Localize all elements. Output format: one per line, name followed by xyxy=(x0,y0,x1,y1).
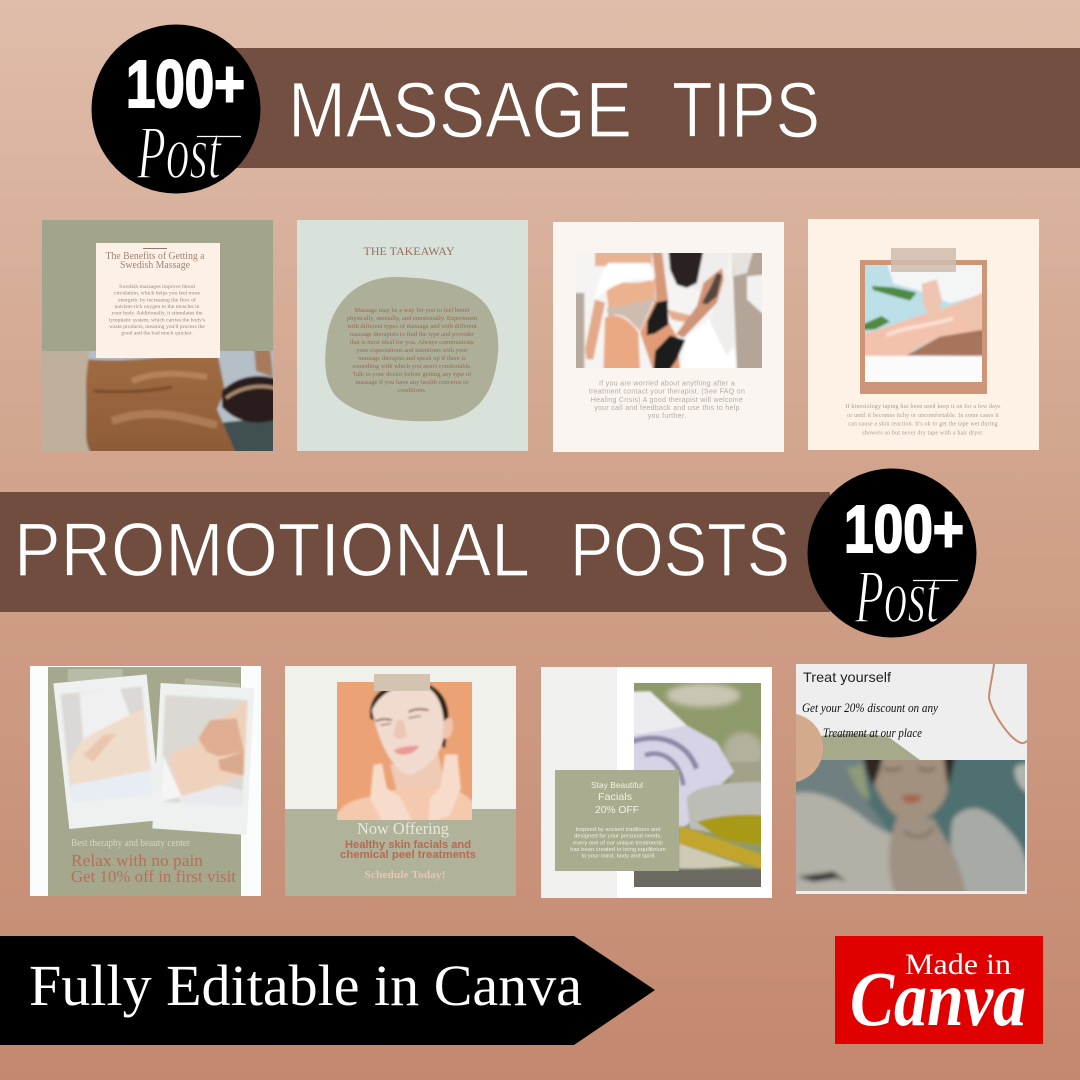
card: now offering: Healthy skin facials and xyxy=(345,839,471,851)
text panel: waste products, meaning you'll process the xyxy=(109,324,205,330)
text panel xyxy=(96,243,220,358)
card: relax with no pain: Relax with no pain xyxy=(71,851,204,870)
card: now offering: chemical peel treatments xyxy=(340,849,476,861)
card: the takeaway: conditions. xyxy=(398,387,427,394)
text box xyxy=(555,770,679,871)
card: the takeaway: with different types of massage and with different xyxy=(347,323,477,330)
text box: designed for your personal needs, xyxy=(574,834,662,840)
card: therapist photo and advice: treatment contact your therapist. (See FAQ on xyxy=(589,389,745,396)
card: now offering: Schedule Today! xyxy=(364,869,446,881)
card: the takeaway: massage therapist and speak up if there is xyxy=(358,355,466,362)
text panel: your body. Additionally, it stimulates the xyxy=(111,311,203,317)
card: the takeaway: your expectations and intentions with your xyxy=(356,347,468,354)
text box: every one of our unique treatments xyxy=(573,840,663,846)
header band: massage tips xyxy=(230,48,1080,168)
badge: 100+ post middle xyxy=(808,468,976,639)
text box: has been created to bring equilibrium xyxy=(570,847,666,853)
polaroid left xyxy=(53,674,162,829)
card: the takeaway: Talk to your doctor before getting any type of xyxy=(353,371,472,378)
text box: Inspired by ancient traditions and xyxy=(575,827,661,833)
card: stay beautiful facials xyxy=(541,667,772,898)
card: treat yourself xyxy=(790,664,1030,897)
text panel: good and the bad much quicker. xyxy=(121,331,193,337)
footer arrow banner: Fully Editable in Canva xyxy=(29,953,582,1018)
card: the takeaway: something with which you aren't comfortable. xyxy=(352,363,472,370)
badge: made in Canva: Made in xyxy=(905,948,1011,981)
card: therapist photo and advice: If you are worried about anything after a xyxy=(599,380,735,388)
text panel: The Benefits of Getting a xyxy=(106,251,205,262)
card: therapist photo and advice xyxy=(553,222,784,452)
card: the takeaway: massage therapists to find the type and provider xyxy=(350,331,475,338)
text panel: circulation, which helps you feel more xyxy=(114,290,201,297)
photo: towel and oil xyxy=(634,683,761,887)
card: kinesiology taping: can cause a skin reaction. It's ok to get the tape wet during xyxy=(848,422,998,428)
card: therapist photo and advice: your call and feedback and use this to help xyxy=(594,405,740,412)
card: the takeaway: Massage may be a way for you to feel better xyxy=(354,307,470,314)
text panel: lymphatic system, which carries the body's xyxy=(109,317,205,323)
text panel: Swedish Massage xyxy=(120,260,191,271)
card: the takeaway: that is most ideal for you. Always communicate xyxy=(350,339,474,346)
card: relax with no pain xyxy=(30,666,261,896)
text box: 20% OFF xyxy=(595,804,639,816)
badge: 100+ post middle: 100+ xyxy=(844,492,964,567)
sage shape xyxy=(796,734,920,760)
card: relax with no pain: Best theraphy and beauty center xyxy=(71,838,190,849)
card: the takeaway: THE TAKEAWAY xyxy=(364,244,455,258)
framed photo xyxy=(860,248,987,394)
header band: promotional posts xyxy=(0,492,830,612)
tape xyxy=(891,248,956,272)
heading: promotional posts: PROMOTIONAL xyxy=(14,508,530,593)
card: therapist photo and advice: Healing Crisis) A good therapist will welcome xyxy=(591,397,743,404)
card: relax with no pain: Get 10% off in first visit xyxy=(71,867,236,886)
card: treat yourself: Treat yourself xyxy=(803,669,891,685)
card: kinesiology taping: If kinesiology taping has been used keep it on for a few days xyxy=(845,403,1001,410)
text box: Stay Beautiful xyxy=(591,781,643,790)
badge: 100+ post top: Post xyxy=(136,111,222,195)
text panel: energetic by increasing the flow of xyxy=(118,296,196,303)
photo: facial mask xyxy=(337,682,472,820)
text box: to your mind, body and spirit xyxy=(582,854,655,860)
footer arrow banner xyxy=(0,936,655,1045)
heading: promotional posts: POSTS xyxy=(570,508,790,593)
card: now offering: Now Offering xyxy=(357,819,449,838)
card: the takeaway xyxy=(297,220,528,451)
card: treat yourself: Treatment at our place xyxy=(823,725,922,740)
card: kinesiology taping xyxy=(808,219,1039,450)
photo: therapist massage xyxy=(576,253,762,368)
card: the takeaway: physically, mentally, and emotionally. Experiment xyxy=(347,315,477,322)
badge: made in Canva: Canva xyxy=(850,955,1026,1042)
text box: Facials xyxy=(598,791,632,803)
card: treat yourself: Get your 20% discount on any xyxy=(802,700,938,715)
card: the takeaway: massage if you have any health concerns or xyxy=(355,379,469,386)
copper line xyxy=(989,664,1027,743)
card: kinesiology taping: or until it becomes itchy or uncomfortable. In some cases it xyxy=(847,412,999,419)
text panel: Swedish massages improve blood xyxy=(119,284,195,290)
tape xyxy=(374,674,430,691)
heading: massage tips: MASSAGE xyxy=(288,65,632,154)
text panel: nutrient-rich oxygen to the muscles in xyxy=(115,304,200,310)
photo: bath xyxy=(796,760,1025,891)
polaroid right xyxy=(152,683,254,835)
photo: back massage xyxy=(42,351,273,451)
card: kinesiology taping: showers so but never dry tape with a hair dryer. xyxy=(862,430,984,436)
blob xyxy=(325,277,498,421)
heading: massage tips: TIPS xyxy=(672,65,820,154)
card: now offering xyxy=(285,666,516,896)
badge: 100+ post top: 100+ xyxy=(126,47,245,122)
badge: 100+ post top xyxy=(92,24,260,195)
card: benefits of Swedish massage xyxy=(37,220,278,456)
badge: 100+ post middle: Post xyxy=(854,555,940,639)
tan circle xyxy=(796,714,823,782)
card: therapist photo and advice: you further. xyxy=(648,413,686,420)
